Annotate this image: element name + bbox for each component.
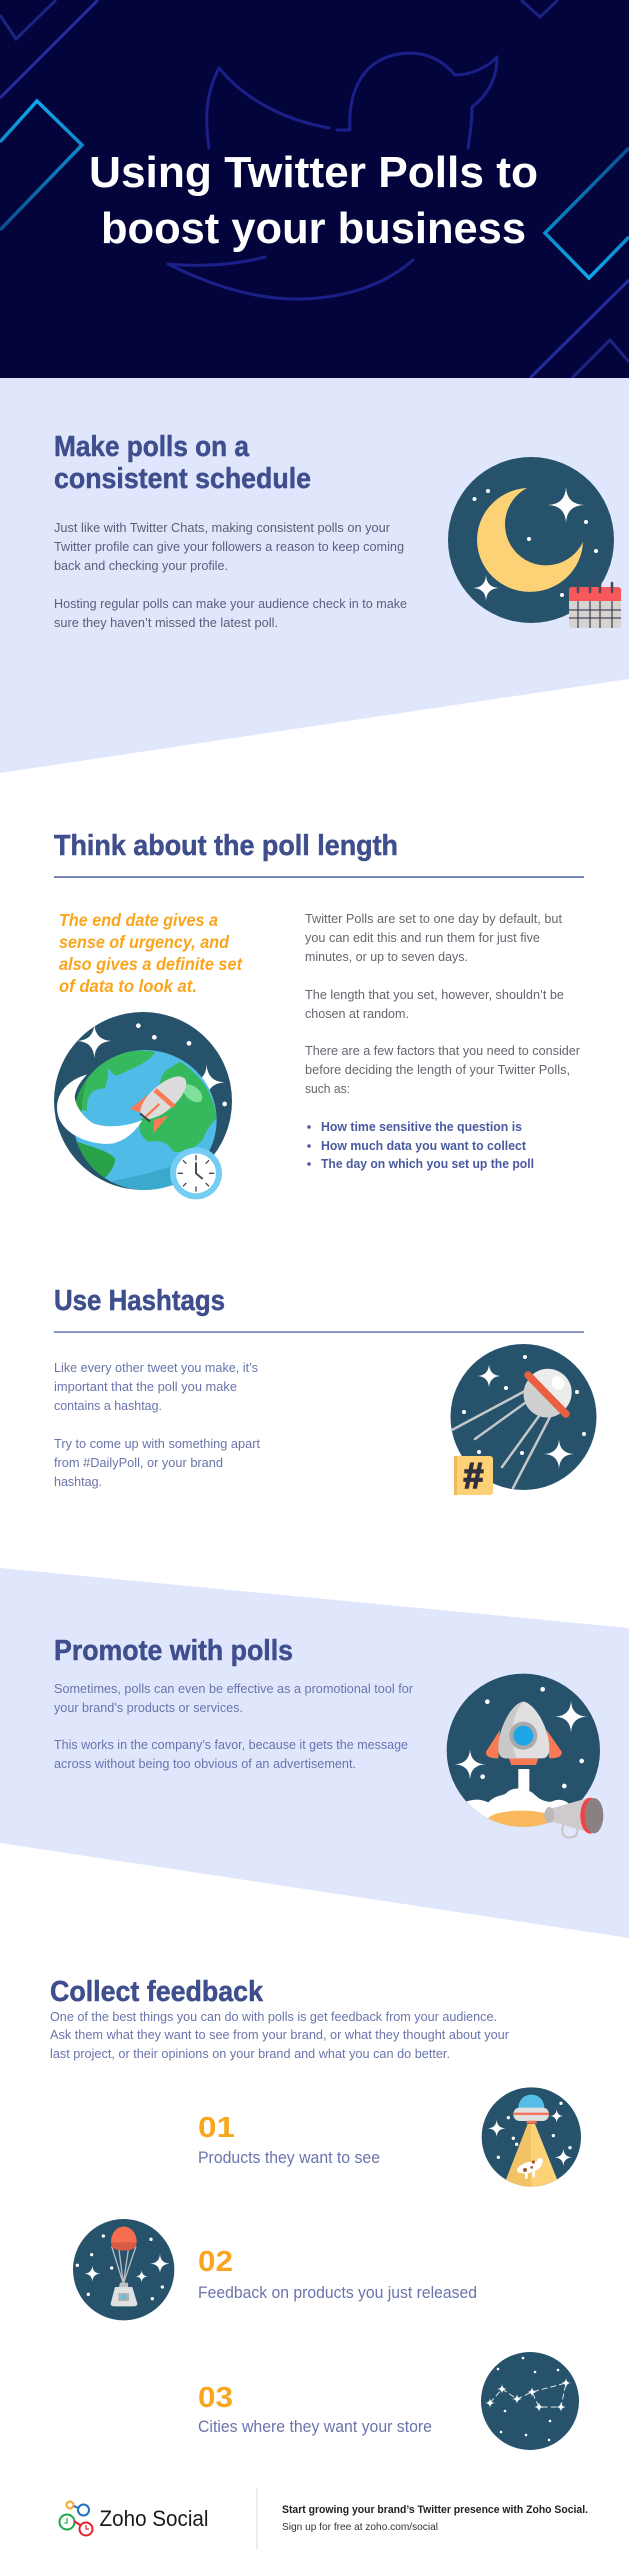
body text: The length that you set, however, shouldn’t be	[305, 987, 564, 1002]
icon: megaphone	[544, 1798, 603, 1838]
body text	[54, 1681, 414, 1771]
decorative right diamond	[545, 148, 629, 278]
heading: Make polls on a	[54, 431, 250, 463]
icon: satellite with hashtag	[450, 1344, 596, 1496]
body text: from #DailyPoll, or your brand	[54, 1455, 223, 1470]
body text: chosen at random.	[305, 1006, 409, 1021]
body text: Hosting regular polls can make your audience check in to make	[54, 596, 407, 611]
icon: parachute capsule	[73, 2219, 174, 2320]
heading: Promote with polls	[54, 1635, 293, 1667]
body text: contains a hashtag.	[54, 1398, 162, 1413]
icon: calendar	[569, 583, 621, 628]
body text: back and checking your profile.	[54, 558, 228, 573]
item 01	[198, 2112, 380, 2167]
body text	[305, 911, 581, 1096]
callout: orange quote: The end date gives a	[59, 910, 218, 930]
decorative left diamond	[0, 101, 82, 230]
icon: hashtag tile: #	[463, 1455, 484, 1496]
body text: Just like with Twitter Chats, making consistent polls on your	[54, 520, 391, 535]
body text: minutes, or up to seven days.	[305, 949, 468, 964]
callout: orange quote: sense of urgency, and	[59, 932, 229, 952]
header banner	[0, 0, 629, 379]
body text: before deciding the length of your Twitter Polls,	[305, 1062, 570, 1077]
body text: last project, or their opinions on your brand and what you can do better.	[50, 2046, 450, 2061]
item 02: 02	[198, 2246, 233, 2278]
body text	[54, 1360, 260, 1489]
bullet list: The day on which you set up the poll	[321, 1156, 534, 1171]
item 03: Cities where they want your store	[198, 2418, 432, 2436]
body text: Like every other tweet you make, it’s	[54, 1360, 258, 1375]
title	[89, 148, 538, 253]
panel: make polls on a consistent schedule	[0, 378, 629, 773]
clock	[170, 1147, 222, 1199]
body text: your brand’s products or services.	[54, 1700, 243, 1715]
heading	[54, 431, 311, 495]
decorative top-right chevron	[521, 0, 558, 17]
item 01: 01	[198, 2112, 235, 2144]
heading: Collect feedback	[50, 1976, 264, 2008]
body text: Twitter profile can give your followers a reason to keep coming	[54, 539, 404, 554]
bullet list: How much data you want to collect	[321, 1138, 527, 1153]
heading: Use Hashtags	[54, 1285, 225, 1317]
title: boost your business	[101, 204, 526, 253]
body text: you can edit this and run them for just five	[305, 930, 540, 945]
decorative bird outline	[168, 53, 497, 299]
body text: One of the best things you can do with polls is get feedback from your audience.	[50, 2009, 497, 2024]
bullet list	[307, 1119, 534, 1171]
logo: Zoho Social	[60, 2502, 208, 2536]
item 03: 03	[198, 2382, 233, 2414]
body text: sure they haven’t missed the latest poll.	[54, 615, 278, 630]
callout: orange quote	[59, 910, 243, 996]
item 03	[198, 2382, 432, 2436]
body text: such as:	[305, 1081, 350, 1096]
footer	[60, 2488, 588, 2549]
heading: consistent schedule	[54, 463, 311, 495]
icon: rocket launch with megaphone	[447, 1674, 603, 1838]
icon: hashtag tile	[454, 1455, 493, 1496]
decorative top-left lines	[0, 0, 98, 98]
callout: orange quote: of data to look at.	[59, 976, 197, 996]
body text	[54, 520, 407, 630]
icon: moon and calendar	[448, 457, 621, 628]
body text: important that the poll you make	[54, 1379, 237, 1394]
body text: Twitter Polls are set to one day by default, but	[305, 911, 562, 926]
body text: Try to come up with something apart	[54, 1436, 260, 1451]
call to action: Sign up for free at zoho.com/social	[282, 2521, 438, 2533]
body text: Sometimes, polls can even be effective as a promotional tool for	[54, 1681, 414, 1696]
panel: use hashtags	[54, 1285, 596, 1496]
item 02: Feedback on products you just released	[198, 2284, 477, 2302]
panel: promote with polls	[0, 1568, 629, 1938]
icon: cow	[516, 2158, 543, 2179]
title: Using Twitter Polls to	[89, 148, 538, 197]
item 02	[198, 2246, 477, 2302]
callout: orange quote: also gives a definite set	[59, 954, 243, 974]
decorative bottom-right lines	[530, 280, 629, 378]
heading: Think about the poll length	[54, 830, 398, 862]
body text: hashtag.	[54, 1474, 102, 1489]
item 01: Products they want to see	[198, 2149, 380, 2167]
body text: across without being too obvious of an advertisement.	[54, 1756, 356, 1771]
logo: Zoho Social: Zoho Social	[100, 2506, 208, 2531]
bullet list: How time sensitive the question is	[321, 1119, 522, 1134]
call to action: Start growing your brand’s Twitter presence with Zoho Social.	[282, 2504, 588, 2516]
icon: constellation	[481, 2352, 579, 2450]
rocket	[130, 1069, 193, 1134]
icon: ufo and cow	[482, 2087, 581, 2187]
panel: think about the poll length	[54, 830, 584, 1205]
panel: collect feedback	[50, 1976, 581, 2450]
body text	[50, 2009, 510, 2061]
body text: This works in the company’s favor, because it gets the message	[54, 1737, 408, 1752]
body text: There are a few factors that you need to consider	[305, 1043, 581, 1058]
body text: Ask them what they want to see from your brand, or what they thought about your	[50, 2027, 510, 2042]
icon: earth with rocket and clock	[54, 1012, 232, 1205]
call to action	[282, 2504, 588, 2533]
